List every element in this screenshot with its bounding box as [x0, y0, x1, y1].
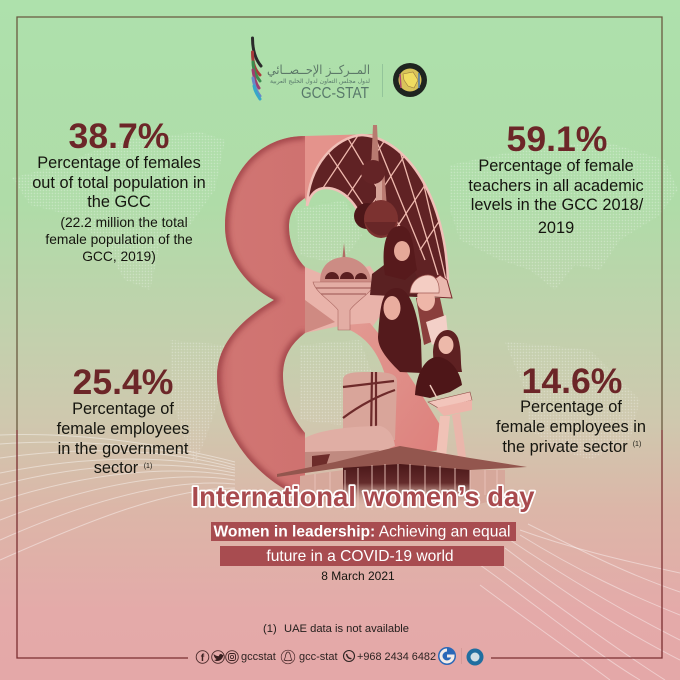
stat: 59.1%: teachers in all academic — [468, 177, 644, 195]
stat: 14.6%: the private sector — [502, 438, 628, 456]
left half of the 8 — [217, 136, 305, 492]
stat: 38.7%: (22.2 million the total — [60, 215, 188, 230]
footer contacts — [196, 647, 483, 666]
date: 8 March 2021 — [321, 569, 395, 583]
icon: facebook — [196, 651, 209, 664]
handle: gcc-stat: gcc-stat — [299, 651, 338, 663]
stat: 25.4%: sector — [94, 459, 139, 477]
icon: colored sash — [252, 38, 261, 99]
handle: gccstat: gccstat — [241, 651, 276, 663]
stat: 25.4%: (1) — [144, 463, 152, 470]
icon: snapchat — [281, 650, 295, 664]
stat: 38.7%: female population of the — [45, 232, 193, 247]
stat: 25.4%: in the government — [58, 440, 189, 458]
world map dots — [12, 132, 678, 465]
subtitle banner line 2: future in a COVID-19 world — [266, 548, 454, 565]
icon: instagram — [226, 651, 238, 663]
stat: 38.7%: GCC, 2019) — [82, 249, 156, 264]
footnote: (1) — [263, 623, 277, 635]
stat: 14.6%: (1) — [633, 441, 641, 448]
big number 8 — [210, 130, 442, 495]
stat: 14.6%: 14.6% — [522, 361, 622, 401]
pale wall behind monument — [305, 266, 392, 333]
stat: 59.1%: 59.1% — [507, 119, 607, 159]
logo text: المــركــز الإحــصــائي — [267, 62, 370, 78]
woman with pen at desk — [415, 330, 472, 457]
right diagonal of the lower lobe — [345, 323, 442, 455]
logo text: لدول مجلس التعاون لدول الخليج العربية — [270, 79, 370, 85]
Oman monument — [305, 243, 376, 333]
Kuwait towers — [354, 125, 398, 238]
stat: 38.7% — [32, 116, 206, 264]
stat: 38.7%: out of total population in — [32, 174, 206, 192]
logo: blue G — [438, 647, 456, 665]
logo: round emblem — [466, 648, 484, 666]
pavilion building — [277, 446, 527, 510]
stat: 25.4%: female employees — [57, 420, 189, 438]
emblem — [382, 63, 427, 97]
dome building with lattice — [305, 125, 460, 298]
rounded tower building — [343, 372, 397, 440]
logo: GCC-STAT — [252, 38, 427, 102]
stat: 59.1% — [468, 119, 644, 237]
stat: 14.6%: female employees in — [496, 418, 646, 436]
stat: 59.1%: levels in the GCC 2018/ — [471, 196, 644, 214]
stat: 59.1%: 2019 — [538, 219, 574, 237]
woman in black abaya — [378, 288, 422, 373]
stat: 38.7%: the GCC — [87, 193, 151, 211]
icon: whatsapp — [344, 650, 354, 662]
right pink top wedge — [305, 134, 375, 205]
woman in hijab, centre top — [370, 226, 418, 297]
stat: 14.6%: Percentage of — [520, 398, 622, 416]
stat: 25.4%: Percentage of — [72, 400, 174, 418]
lozenge building — [305, 426, 395, 472]
woman with helmet — [410, 275, 448, 345]
stat: 14.6% — [496, 361, 646, 456]
logo text — [267, 62, 370, 102]
stat: 25.4%: 25.4% — [73, 362, 173, 402]
icon: twitter — [212, 651, 224, 663]
stat: 25.4% — [57, 362, 189, 477]
footnote: UAE data is not available — [284, 623, 409, 635]
stat: 59.1%: Percentage of female — [478, 157, 634, 175]
stat: 38.7%: 38.7% — [69, 116, 169, 156]
subtitle banner line 1: Women in leadership: Achieving an equal — [214, 524, 510, 540]
icon: facebook: f — [201, 652, 205, 664]
subtitle banner line 2 — [220, 546, 504, 566]
phone number: +968 2434 6482 — [357, 651, 436, 663]
title: International women’s day — [192, 481, 535, 512]
logo text: GCC-STAT — [301, 85, 369, 102]
decorative curved lines — [0, 435, 680, 680]
stat: 38.7%: Percentage of females — [37, 154, 201, 172]
